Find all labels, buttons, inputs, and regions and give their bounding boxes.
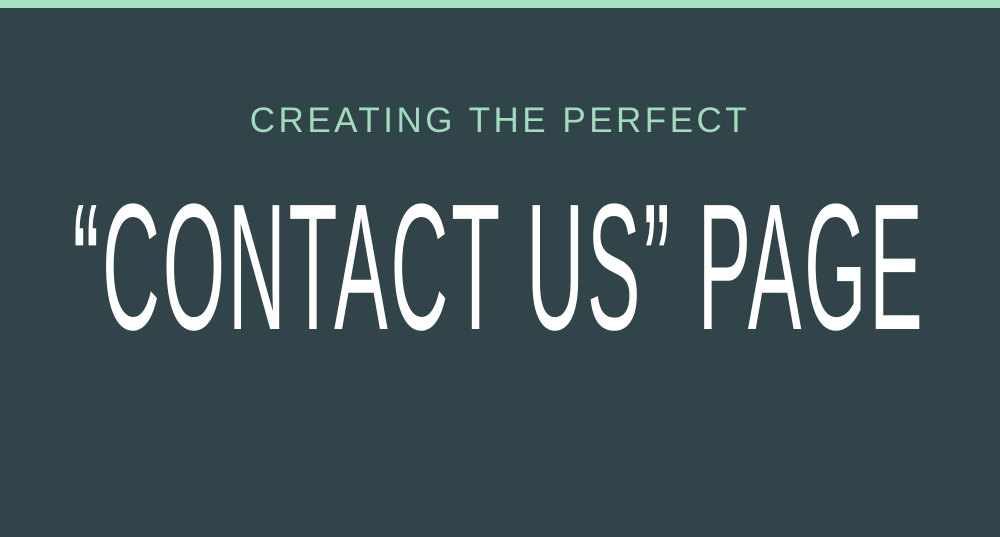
subtitle: CREATING THE PERFECT	[250, 101, 750, 140]
main title: “CONTACT US” PAGE	[73, 167, 925, 368]
top accent bar	[0, 0, 1000, 8]
